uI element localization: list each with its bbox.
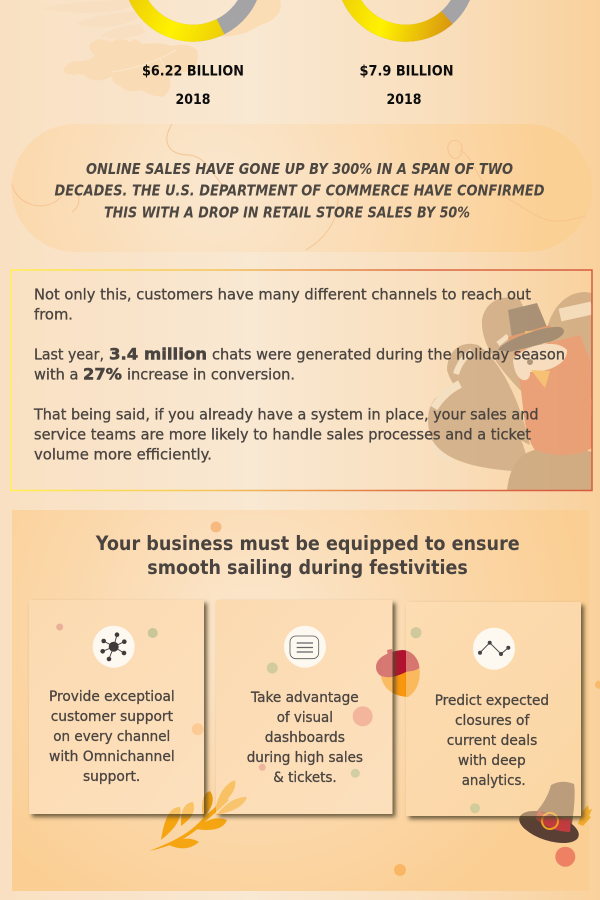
paragraph 2 with stats: 27%: [83, 364, 122, 384]
card 2 text: during high sales: [247, 750, 363, 766]
callout text: ONLINE SALES HAVE GONE UP BY 300% IN A SPAN OF TWO: [86, 160, 513, 178]
paragraph 1: [34, 286, 531, 324]
card 1 text: customer support: [51, 709, 173, 725]
paragraph 2 with stats: with a: [34, 366, 78, 384]
card 1 text: with Omnichannel: [49, 749, 175, 765]
heading: [95, 532, 520, 579]
paragraph 2 with stats: 3.4 million: [109, 344, 207, 364]
donut chart: 2018 left: [132, 0, 254, 33]
donut chart: 2018 right: [344, 0, 468, 33]
panel: online sales callout: [11, 124, 592, 252]
paragraph 2 with stats: Last year,: [34, 346, 104, 364]
decorative dot: [210, 522, 222, 532]
card 1: [29, 600, 204, 814]
callout text: THIS WITH A DROP IN RETAIL STORE SALES BY 50%: [104, 203, 470, 221]
card 3 text: analytics.: [462, 773, 526, 789]
panel: channels text box: [11, 270, 592, 490]
card 2 text: & tickets.: [273, 770, 337, 786]
label: left value: $6.22 BILLION: [142, 64, 244, 80]
card dots: [56, 624, 600, 876]
decorations: acorn, leaf branch, pilgrim hat: [149, 649, 592, 851]
icon: line chart: [473, 628, 515, 670]
autumn leaves behind donut: [40, 0, 281, 97]
paragraph 3: service teams are more likely to handle sales processes and a ticket: [34, 427, 531, 444]
label: left year: 2018: [176, 92, 210, 108]
card 3 text: [435, 693, 549, 789]
paragraph 2 with stats: chats were generated during the holiday season: [212, 346, 565, 364]
card 3 text: with deep: [458, 753, 526, 769]
label: right year: 2018: [386, 92, 422, 108]
card 2 text: of visual: [277, 710, 333, 726]
card 2 text: Take advantage: [250, 690, 359, 706]
paragraph 3: volume more efficiently.: [34, 447, 212, 464]
label: right value: $7.9 BILLION: [360, 64, 454, 80]
card 1 text: Provide exceptioal: [49, 689, 175, 705]
card 2: [216, 600, 392, 814]
heading: Your business must be equipped to ensure: [95, 532, 520, 555]
icon: network hub: [93, 626, 135, 668]
icon: dashboard: [284, 626, 326, 668]
card 1 text: on every channel: [53, 729, 170, 745]
card 3 text: Predict expected: [435, 693, 549, 709]
panel: business features section: [12, 510, 600, 891]
faded decorations seen through cards: [168, 649, 581, 816]
paragraph 1: Not only this, customers have many different channels to reach out: [34, 286, 531, 304]
paragraph 1: from.: [34, 306, 73, 324]
heading: smooth sailing during festivities: [147, 556, 468, 579]
card 2 text: [247, 690, 363, 786]
card 3 text: current deals: [447, 733, 537, 749]
paragraph 3: [33, 406, 539, 464]
card 2 text: dashboards: [265, 730, 345, 746]
paragraph 2 with stats: increase in conversion.: [127, 366, 295, 384]
callout text: [54, 160, 544, 221]
card 1 text: support.: [83, 769, 140, 785]
gradient border: [11, 270, 592, 490]
illustration: turkey: [428, 292, 592, 490]
card 3 text: closures of: [455, 713, 530, 729]
paragraph 2 with stats: [34, 344, 565, 384]
paragraph 3: That being said, if you already have a system in place, your sales and: [33, 406, 539, 424]
card 3: [406, 602, 581, 816]
card 1 text: [49, 689, 175, 785]
